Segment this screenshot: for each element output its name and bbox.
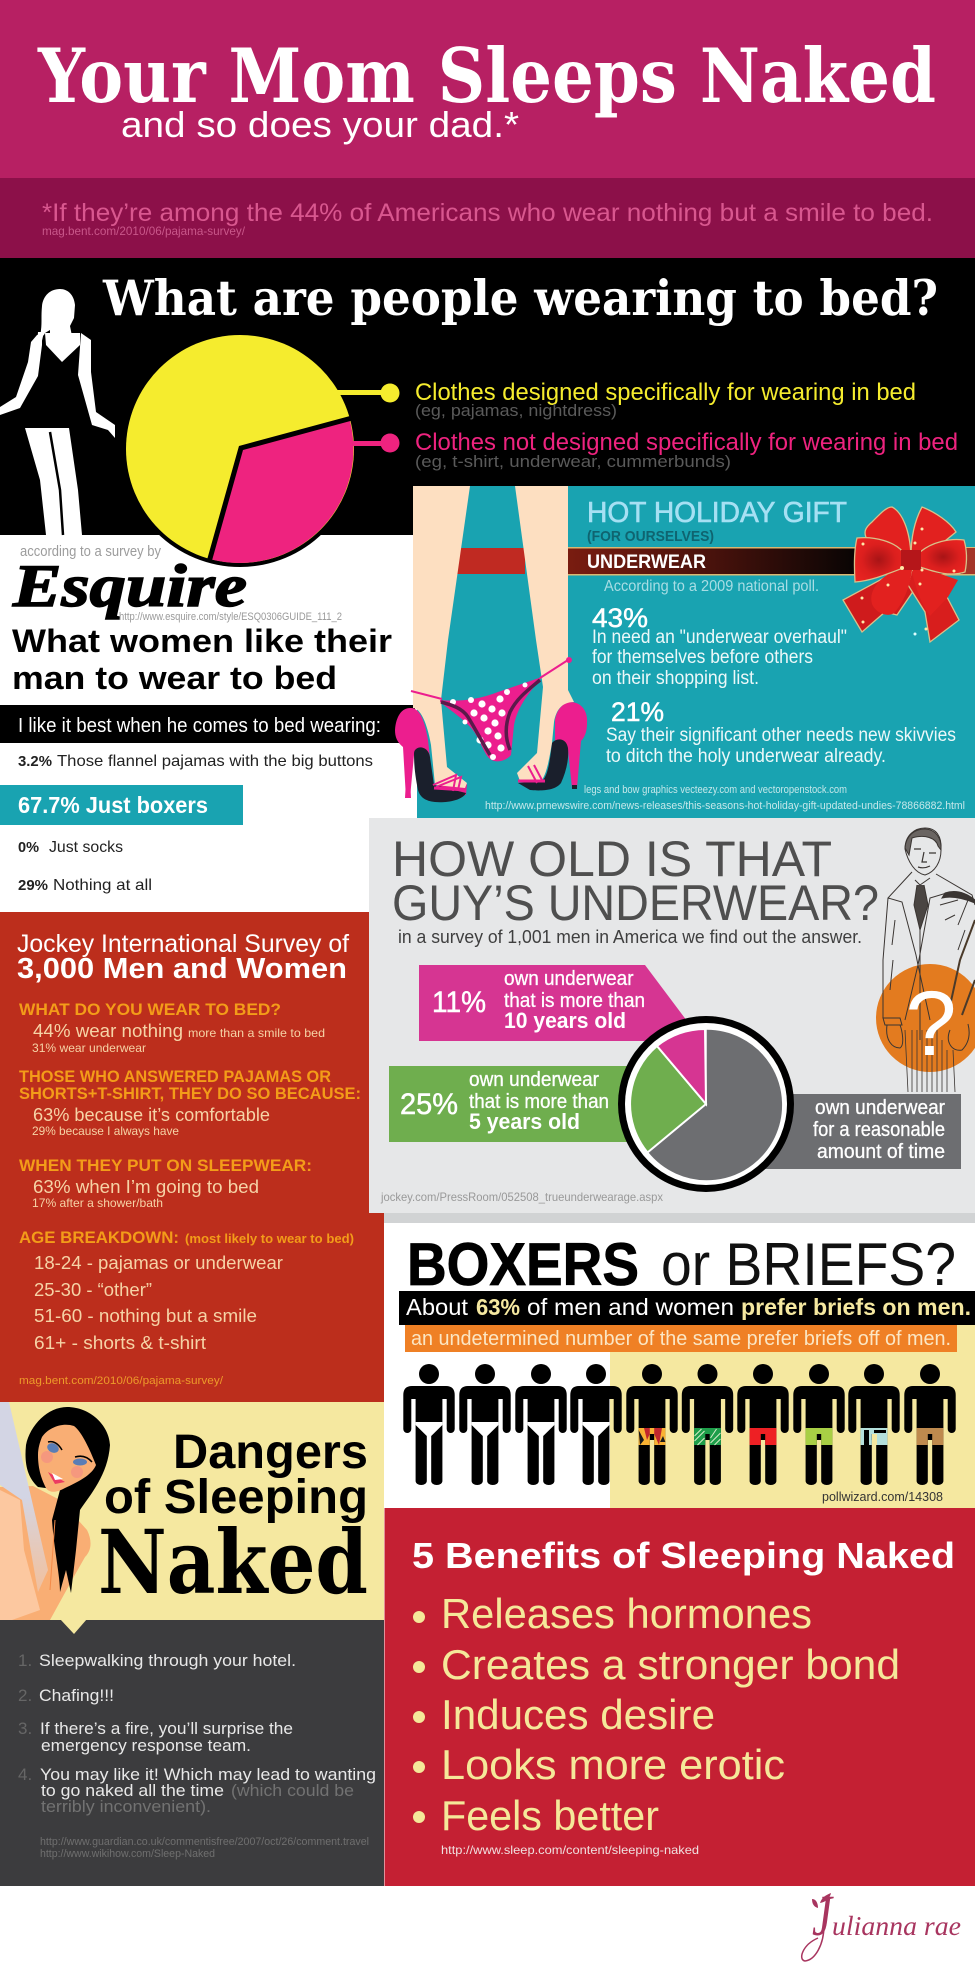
intro: in a survey of 1,001 men in America we find out the answer. (398, 927, 862, 947)
benefit 3: Induces desire (441, 1691, 715, 1738)
icon: legs and shoes (395, 486, 587, 802)
panel: dangers heading (0, 1402, 384, 1620)
callout green: that is more than (469, 1091, 609, 1113)
logo: julianna rae: ulianna rae (832, 1911, 961, 1941)
chart: wearing pie (122, 331, 358, 567)
question 3: WHEN THEY PUT ON SLEEPWEAR: (19, 1156, 312, 1175)
ribbon band (455, 547, 975, 576)
logo: julianna rae: J (812, 1883, 835, 1948)
callout pink: 10 years old (504, 1008, 626, 1033)
source: jockey.com/PressRoom/052508_trueunderwearage.aspx (380, 1190, 663, 1204)
stat 21: 21% (611, 697, 664, 727)
source url: http://www.prnewswire.com/news-releases/this-seasons-hot-holiday-gift-updated-undies-78866882.html (485, 800, 965, 812)
sources: http://www.guardian.co.uk/commentisfree/2007/oct/26/comment.travel (40, 1836, 369, 1848)
icon: sketched man (883, 828, 975, 1092)
age breakdown: 61+ - shorts & t-shirt (34, 1333, 206, 1353)
sources (40, 1836, 369, 1860)
black bar (399, 1291, 975, 1325)
question 3 (19, 1156, 312, 1210)
pictogram: men in boxers (626, 1364, 956, 1485)
item 2: 2. (18, 1686, 32, 1705)
legend yellow: Clothes designed specifically for wearing in bed (415, 379, 916, 406)
row socks: 0% (18, 839, 39, 856)
item 3: emergency response team. (41, 1736, 251, 1755)
item 1: Sleepwalking through your hotel. (39, 1651, 296, 1670)
row boxers highlight: 67.7% Just boxers (18, 792, 208, 818)
shoe straps (433, 765, 545, 791)
heading line 1: What women like their (12, 623, 392, 659)
heading: BOXERS (407, 1231, 639, 1298)
heading line 1: HOW OLD IS THAT (392, 831, 832, 887)
subtitle: and so does your dad.* (121, 104, 519, 145)
source line: according to a survey by (20, 543, 161, 560)
source: mag.bent.com/2010/06/pajama-survey/ (19, 1375, 224, 1387)
icon: woman with curtain (0, 1402, 110, 1620)
source: http://www.sleep.com/content/sleeping-naked (441, 1843, 699, 1857)
question 2: 29% because I always have (32, 1124, 179, 1138)
heading: hot holiday gift: HOT HOLIDAY GIFT (587, 497, 847, 529)
item 4: to go naked all the time (41, 1781, 224, 1800)
item 4: 4. (18, 1765, 32, 1784)
stat 43 line 1: In need an "underwear overhaul" (592, 627, 847, 648)
age breakdown (19, 1228, 354, 1353)
age breakdown: 51-60 - nothing but a smile (34, 1306, 257, 1326)
age breakdown: 18-24 - pajamas or underwear (34, 1253, 283, 1273)
callout pink: 11% (432, 986, 486, 1019)
black bar: prefer briefs on men. (741, 1294, 971, 1320)
item 4 (18, 1765, 376, 1816)
black bar: 63% (476, 1294, 520, 1320)
panel: how old is that guy's underwear (369, 818, 975, 1223)
item 4: terribly inconvenient). (41, 1797, 211, 1816)
callout pink: own underwear (504, 968, 634, 990)
legend yellow note: (eg, pajamas, nightdress) (415, 401, 617, 420)
title: dangers: Dangers (173, 1426, 368, 1479)
heading (407, 1231, 956, 1298)
legs (413, 486, 470, 788)
benefit 4: Looks more erotic (441, 1741, 785, 1788)
item 3: 3. (18, 1719, 32, 1738)
icon: panties (411, 657, 572, 761)
black bar: About (406, 1294, 469, 1320)
black bar (0, 705, 415, 743)
black bar: I like it best when he comes to bed wearing: (18, 715, 381, 737)
callout grey: amount of time (817, 1141, 945, 1163)
callout pink (419, 965, 690, 1041)
icon: orange circle (876, 964, 975, 1072)
question 1: more than a smile to bed (188, 1026, 325, 1040)
callout green (389, 1066, 639, 1142)
source: pollwizard.com/14308 (822, 1489, 943, 1504)
label: underwear: UNDERWEAR (587, 552, 706, 573)
benefit 5: Feels better (441, 1792, 659, 1839)
pictogram: men in briefs (403, 1364, 622, 1485)
left shoe (395, 708, 467, 802)
item 1: 1. (18, 1651, 32, 1670)
callout green: 25% (400, 1088, 458, 1121)
callout grey: own underwear (815, 1097, 945, 1119)
stat 21 line 2: to ditch the holy underwear already. (606, 746, 886, 767)
panel: jockey survey (0, 912, 384, 1402)
black bar: of men and women (527, 1294, 734, 1320)
benefit 1: Releases hormones (441, 1590, 812, 1637)
esquire url: http://www.esquire.com/style/ESQ0306GUIDE_111_2 (119, 611, 342, 623)
question 2: SHORTS+T-SHIRT, THEY DO SO BECAUSE: (19, 1084, 361, 1103)
benefit 2: Creates a stronger bond (441, 1641, 900, 1688)
legend pink note: (eg, t-shirt, underwear, cummerbunds) (415, 452, 731, 471)
bow sparkles (860, 528, 956, 636)
row flannel: Those flannel pajamas with the big buttons (57, 753, 373, 770)
panel: what are people wearing (0, 258, 975, 567)
panel: hot holiday gift (395, 486, 975, 818)
question 2: THOSE WHO ANSWERED PAJAMAS OR (19, 1067, 331, 1086)
callout pink: that is more than (504, 990, 645, 1012)
item 3: If there’s a fire, you’ll surprise the (40, 1719, 293, 1738)
question 2 (19, 1067, 361, 1138)
title: naked: Naked (98, 1510, 368, 1614)
title: of sleeping: of Sleeping (104, 1471, 368, 1524)
item 4: You may like it! Which may lead to wanting (40, 1765, 376, 1784)
callout grey: for a reasonable (813, 1119, 945, 1141)
panel: boxers or briefs (384, 1223, 975, 1508)
heading line 2: GUY’S UNDERWEAR? (392, 875, 879, 931)
stat 43: 43% (592, 603, 648, 633)
question 1: WHAT DO YOU WEAR TO BED? (19, 1000, 281, 1019)
icon: woman silhouette (0, 289, 115, 535)
question 3: 63% when I’m going to bed (33, 1177, 259, 1197)
logo: julianna rae (802, 1883, 961, 1961)
question 1: 44% wear nothing (33, 1021, 183, 1041)
panel: footnote band (0, 178, 975, 258)
right shoe (518, 702, 587, 790)
question 3: 17% after a shower/bath (32, 1196, 163, 1210)
item 3 (18, 1719, 293, 1755)
heading line 1: Jockey International Survey of (17, 930, 349, 958)
heading line 2: man to wear to bed (12, 660, 337, 696)
heading line 2: 3,000 Men and Women (17, 953, 347, 985)
heading: 5 Benefits of Sleeping Naked (412, 1535, 955, 1576)
icon: red bow (843, 507, 966, 642)
row nothing: Nothing at all (53, 877, 152, 894)
footnote source: mag.bent.com/2010/06/pajama-survey/ (42, 224, 246, 238)
question 1 (19, 1000, 325, 1055)
heading: or BRIEFS? (661, 1231, 956, 1298)
chart: underwear age pie (618, 1016, 794, 1192)
orange bar: an undetermined number of the same prefer briefs off of men. (411, 1328, 951, 1350)
panel: dangers list (0, 1619, 384, 1886)
notch (60, 1619, 87, 1634)
text: poll: According to a 2009 national poll. (604, 578, 819, 595)
question 2: 63% because it’s comfortable (33, 1105, 270, 1125)
item 4: (which could be (231, 1781, 354, 1800)
callout green: 5 years old (469, 1109, 580, 1134)
stat 43 line 2: for themselves before others (592, 647, 813, 668)
sources: http://www.wikihow.com/Sleep-Naked (40, 1848, 215, 1860)
esquire logo: Esquire (12, 553, 247, 619)
row boxers highlight (0, 785, 243, 825)
question mark: ? (905, 973, 957, 1075)
panel: header (0, 0, 975, 178)
callout grey (750, 1094, 961, 1169)
stat 43 line 3: on their shopping list. (592, 668, 759, 689)
question 1: 31% wear underwear (32, 1041, 146, 1055)
footnote text: *If they’re among the 44% of Americans who wear nothing but a smile to bed. (42, 199, 933, 227)
callout green: own underwear (469, 1069, 599, 1091)
credit: legs and bow graphics vecteezy.com and vectoropenstock.com (584, 784, 847, 796)
age breakdown: 25-30 - “other” (34, 1280, 152, 1300)
row nothing (18, 877, 152, 894)
age breakdown: (most likely to wear to bed) (185, 1231, 354, 1246)
age breakdown: AGE BREAKDOWN: (19, 1228, 179, 1247)
panel: what women like (0, 543, 415, 894)
row socks: Just socks (49, 839, 123, 856)
connector yellow (335, 384, 400, 402)
item 2: Chafing!!! (39, 1686, 114, 1705)
row nothing: 29% (18, 877, 48, 894)
legend pink: Clothes not designed specifically for wearing in bed (415, 429, 958, 456)
connector pink (352, 434, 400, 452)
subheading: for ourselves: (FOR OURSELVES) (587, 528, 714, 545)
panel: benefits (384, 1508, 975, 1886)
row flannel: 3.2% (18, 753, 52, 770)
